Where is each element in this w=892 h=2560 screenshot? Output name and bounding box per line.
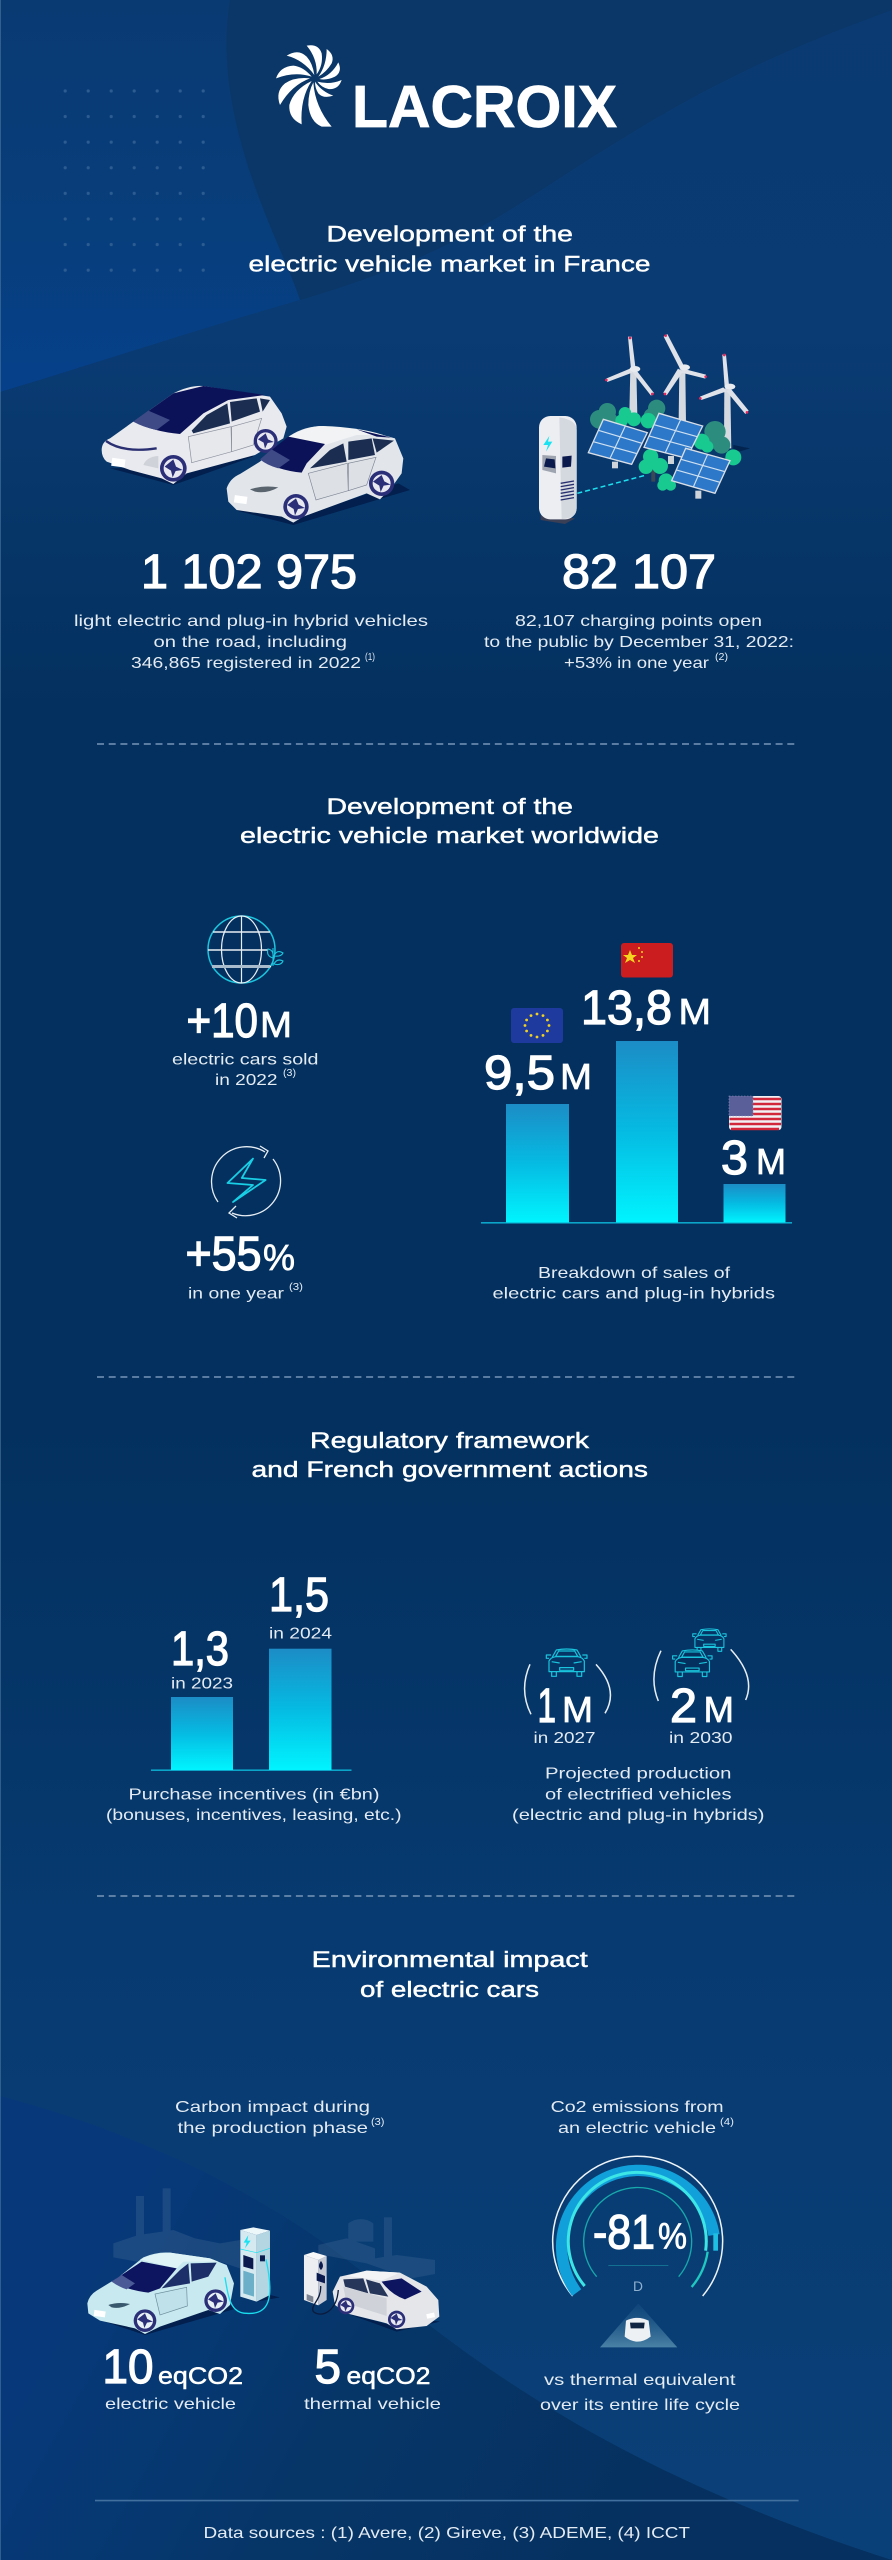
flag: EU [511,1008,563,1043]
bar chart: sales by region [481,943,792,1224]
bar: USA [724,1184,786,1222]
stat: plus 55 percent: (3) [289,1282,303,1293]
label: 9,5M: 9,5 [484,1047,555,1100]
caption: purchase incentives: (bonuses, incentives, leasing, etc.) [106,1807,402,1824]
wind turbine 2 [663,334,707,422]
stat: plus 55 percent: in one year [188,1286,285,1302]
heading: France market: Development of the [326,222,573,246]
wheel [369,471,394,496]
flag: China [621,943,673,978]
illustration: two electric cars [102,386,410,525]
stat: charging points: 82 107 [562,546,716,599]
label: 3M: 3 [721,1132,748,1185]
subheading: CO2 emissions: an electric vehicle [558,2120,716,2137]
stat: charging points: 82,107 charging points open [515,613,762,630]
heading: worldwide market: Development of the [326,794,573,819]
heading: environmental impact: Environmental impact [312,1947,589,1972]
stat: charging points: to the public by December 31, 2022: [484,634,794,651]
stat: electric vehicle 10 eqCO2: electric vehicle [105,2396,236,2413]
stat: 1M in 2027: M [562,1689,593,1730]
electric car [87,2253,237,2335]
icon: globe with leaf [208,916,283,983]
label: 1,3 in 2023: 1,3 [171,1623,229,1676]
heading: regulatory framework: and French government actions [252,1457,648,1482]
caption: vs thermal equivalent [540,2372,740,2414]
fuel pump [304,2252,327,2305]
illustration: charging station and renewable energy [539,334,750,524]
label: 3M [721,1132,786,1185]
heading: environmental impact [312,1947,589,2002]
stat: electric vehicle 10 eqCO2 [102,2341,243,2413]
label: 1,5 in 2024 [269,1569,332,1643]
caption: projected production [512,1766,764,1824]
dot pattern decoration [60,87,210,275]
chart caption [492,1265,775,1302]
subheading: carbon impact: Carbon impact during [175,2099,370,2116]
label: 9,5M: M [560,1056,592,1097]
charger [539,416,577,524]
stat: electric vehicle 10 eqCO2: eqCO2 [158,2363,243,2390]
icons: cars and arcs [525,1629,749,1714]
stat: 2M in 2030 [669,1680,734,1747]
stat: 2M in 2030: in 2030 [669,1730,733,1747]
subheading: carbon impact: the production phase [178,2120,368,2137]
thermal car [333,2271,440,2332]
label: 1,5 in 2024: in 2024 [269,1626,332,1643]
wind turbine 3 [699,354,749,448]
stat: plus 55 percent: +55 [186,1228,262,1281]
logo wordmark: LACROIX [352,74,617,140]
electric charger [240,2227,280,2302]
subheading: CO2 emissions: Co2 emissions from [551,2099,724,2116]
stat: thermal vehicle 5 eqCO2 [304,2341,441,2413]
wheel [160,455,187,482]
icon: car [693,1629,726,1651]
chart caption: electric cars and plug-in hybrids [492,1286,775,1302]
solar panel [644,413,703,464]
caption: vs thermal equivalent: vs thermal equivalent [544,2372,736,2389]
heading: worldwide market: electric vehicle market worldwide [240,823,659,848]
stat: 10 million cars sold: in 2022 [215,1072,278,1089]
stat: charging points: +53% in one year [564,655,710,672]
caption: projected production: Projected production [545,1766,732,1783]
stat: thermal vehicle 5 eqCO2: eqCO2 [346,2363,430,2390]
stat: 1M in 2027: 1 [538,1680,556,1733]
subheading: CO2 emissions [551,2099,734,2137]
stat: plus 55 percent: % [263,1237,295,1278]
label: 1,5 in 2024: 1,5 [269,1569,329,1622]
stat: vehicles on the road: light electric and plug-in hybrid vehicles [74,613,428,630]
factory left [113,2188,240,2268]
stat: vehicles on the road: on the road, including [154,634,347,651]
wheel [338,2298,354,2314]
stat: 10 million cars sold: M [260,1004,292,1045]
heading: France market: electric vehicle market in France [248,252,650,276]
wind turbine 1 [605,337,654,415]
stat: plus 55 percent [186,1228,303,1302]
heading: regulatory framework: Regulatory framework [310,1428,590,1453]
logo swirl icon [276,45,342,127]
solar panel [672,448,730,499]
stat: 10 million cars sold: (3) [283,1068,296,1079]
fuel hose [313,2286,338,2314]
bar: 2023 [171,1697,233,1770]
stat: 10 million cars sold: +10 [186,995,258,1048]
wheel [388,2311,405,2328]
stat: vehicles on the road: 346,865 registered in 2022 [131,655,361,672]
caption: vs thermal equivalent: over its entire life cycle [540,2397,740,2414]
subheading: carbon impact [175,2099,384,2137]
stat: vehicles on the road: 1 102 975 [141,546,357,599]
label: 13,8M: M [678,991,711,1032]
gear indicator D: D [633,2278,643,2294]
flag: USA [729,1096,782,1130]
caption: purchase incentives [106,1787,402,1824]
subheading: carbon impact: (3) [371,2117,384,2128]
chart caption: Breakdown of sales of [538,1265,731,1282]
stat: thermal vehicle 5 eqCO2: thermal vehicle [304,2396,441,2413]
stat: 2M in 2030: 2 [670,1680,697,1733]
gauge: minus 81 percent [553,2156,723,2347]
bar chart: purchase incentives [151,1569,352,1771]
wheel [283,494,309,519]
label: 3M: M [756,1141,786,1182]
stat: 10 million cars sold: electric cars sold [172,1052,318,1068]
label: 9,5M [484,1047,592,1100]
heading: worldwide market [240,794,659,848]
stat: vehicles on the road [74,546,428,672]
caption: purchase incentives: Purchase incentives (in €bn) [128,1787,380,1804]
wheel [134,2309,156,2332]
stat: 1M in 2027: in 2027 [534,1730,596,1747]
heading: France market [248,222,650,276]
section: France market [74,222,794,672]
heading: regulatory framework [252,1428,648,1482]
wheel [204,2289,227,2312]
label: 13,8M: 13,8 [581,982,672,1035]
section: worldwide market [172,794,792,1302]
gauge value: -81 [593,2206,655,2260]
stat: charging points [484,546,794,672]
caption: projected production: (electric and plug-in hybrids) [512,1807,764,1824]
stat: thermal vehicle 5 eqCO2: 5 [314,2341,341,2394]
bar: 2024 [269,1649,332,1770]
illustration: cars, chargers and factories [87,2188,440,2335]
bar: Europe [506,1104,569,1222]
icon: car [546,1649,587,1676]
stat: charging points: (2) [715,652,728,663]
gauge value: % [658,2216,687,2256]
trees [590,400,741,491]
heading: environmental impact: of electric cars [360,1977,539,2002]
stat: 10 million cars sold [172,995,318,1089]
bar: China [616,1041,678,1222]
data sources: Data sources : (1) Avere, (2) Gireve, (3) ADEME, (4) ICCT [204,2525,690,2542]
icon: car [673,1650,712,1676]
charging cable [225,2259,270,2313]
stat: vehicles on the road: (1) [365,652,375,663]
solar panel [588,419,647,468]
subheading: CO2 emissions: (4) [720,2117,734,2128]
section: regulatory framework [106,1428,764,1824]
connection dashed line [577,476,644,493]
stat: 1M in 2027 [534,1680,596,1747]
stat: electric vehicle 10 eqCO2: 10 [102,2341,154,2394]
gauge dial [553,2156,723,2347]
wheel [254,429,278,453]
caption: projected production: of electrified vehicles [545,1787,732,1804]
logo [276,45,617,140]
factory right [318,2217,435,2279]
section: environmental impact [87,1947,740,2414]
label: 1,3 in 2023: in 2023 [171,1676,233,1692]
icon: lightning bolt with cycle arrows [212,1146,281,1218]
stat: 2M in 2030: M [704,1689,734,1730]
